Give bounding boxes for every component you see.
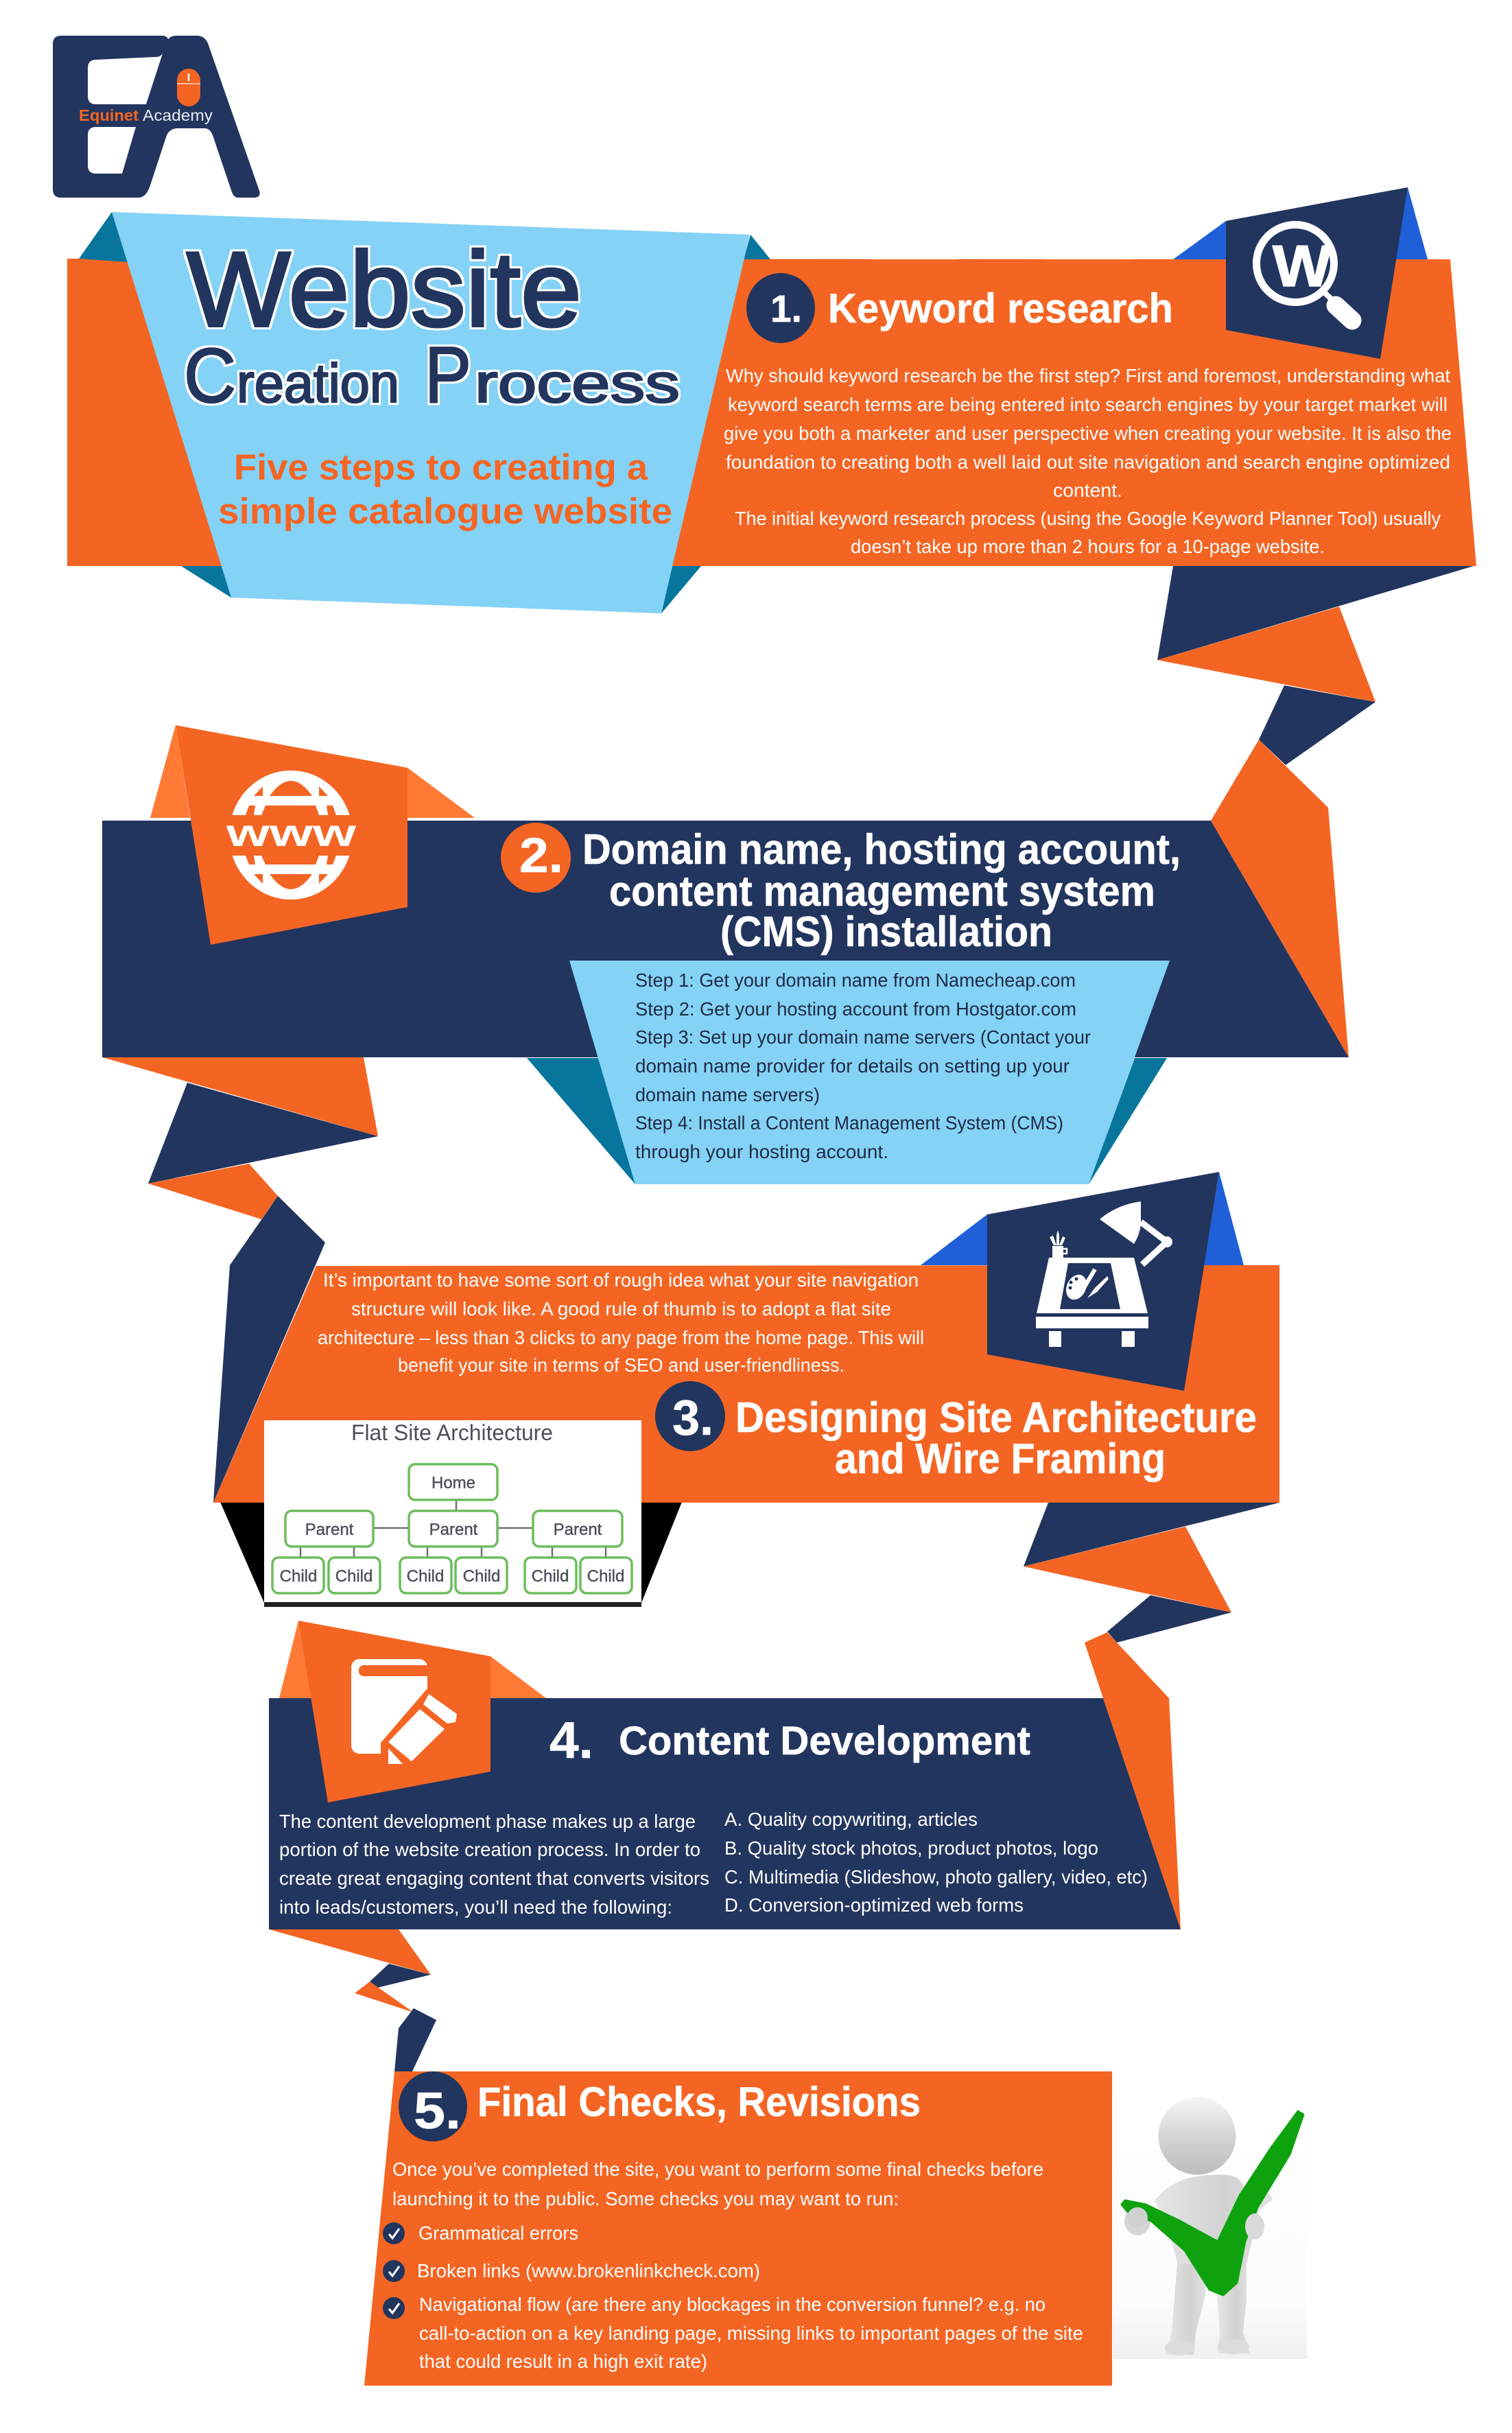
banner 3: orange ribbon [213, 1265, 1279, 1503]
diagram labels: Parent [429, 1520, 478, 1539]
step 1 icon: magnifier with W: W [1273, 234, 1332, 299]
step 2 panel: step list: through your hosting account. [635, 1141, 888, 1162]
step 4 heading: Content Development [619, 1719, 1030, 1763]
step 1 icon: magnifier with W [1173, 187, 1428, 359]
illustration: figure holding green check mark [1113, 2097, 1307, 2359]
step 2 heading: content management system [609, 868, 1155, 915]
step 2 panel: step list: Step 2: Get your hosting account from Hostgator.com [635, 998, 1076, 1020]
step 5 intro: Once you’ve completed the site, you want to perform some final checks before [392, 2159, 1043, 2180]
step 2 number [501, 823, 571, 893]
diagram labels: Child [335, 1567, 373, 1586]
step 5 number [399, 2071, 467, 2141]
step 2 panel: step list: Step 1: Get your domain name from Namecheap.com [635, 969, 1076, 991]
connector ribbon 2 to 3 [213, 1196, 325, 1503]
step 3 heading: Designing Site Architecture [735, 1394, 1257, 1442]
step 4 list: D. Conversion-optimized web forms [724, 1894, 1024, 1916]
step 4 list [724, 1809, 1148, 1916]
banner 3 back folds: black [220, 1502, 682, 1603]
diagram labels: Child [407, 1567, 444, 1586]
banner 4 right fold [1085, 1632, 1181, 1929]
step 1 body text: content. [1053, 480, 1122, 501]
title: Creation Process: reation [237, 353, 399, 414]
step 2 panel: step list: Step 4: Install a Content Management System (CMS) [635, 1112, 1063, 1133]
diagram labels: Child [587, 1567, 624, 1586]
step 3 number: 3. [672, 1391, 713, 1446]
step 1 body text: doesn’t take up more than 2 hours for a 10-page website. [851, 536, 1325, 557]
step 4 list: B. Quality stock photos, product photos, logo [724, 1837, 1098, 1859]
step 2 panel: step list: Step 3: Set up your domain name servers (Contact your [635, 1026, 1091, 1048]
step 5 heading: Final Checks, Revisions [477, 2079, 921, 2125]
diagram labels: Child [532, 1567, 569, 1586]
step 4 number: 4. [550, 1711, 593, 1769]
step 2 icon: www globe: www [226, 811, 357, 854]
diagram labels: Home [432, 1474, 475, 1492]
bullet: navigational flow: Navigational flow (are there any blockages in the conversion funnel? e.g. no [419, 2294, 1046, 2315]
banner 1: orange ribbon [67, 259, 1476, 566]
bullet: broken links: Broken links (www.brokenlinkcheck.com) [417, 2260, 760, 2281]
title: Creation Process: rocess [475, 353, 680, 414]
step 3 heading: and Wire Framing [835, 1435, 1166, 1483]
logo wordmark: Academy [143, 106, 213, 124]
step 3 number [655, 1381, 725, 1451]
step 4 left text: create great engaging content that converts visitors [279, 1868, 709, 1889]
step 1 body text: give you both a marketer and user perspective when creating your website. It is also the [724, 423, 1452, 444]
step 3 body text: structure will look like. A good rule of thumb is to adopt a flat site [351, 1298, 891, 1319]
title: Creation Process: C [184, 333, 236, 419]
title: Creation Process [184, 330, 680, 419]
step 3 icon: drafting desk [921, 1172, 1244, 1391]
subtitle: Five steps to creating a [234, 447, 648, 488]
title: Creation Process: P [425, 330, 471, 419]
step 3 body text: It’s important to have some sort of rough idea what your site navigation [323, 1269, 919, 1291]
bullet: navigational flow: call-to-action on a key landing page, missing links to important pages of the site [419, 2323, 1083, 2344]
subtitle [218, 447, 672, 532]
logo wordmark [79, 106, 213, 124]
step 1 body text: The initial keyword research process (using the Google Keyword Planner Tool) usually [735, 508, 1441, 529]
step 2 heading: (CMS) installation [720, 908, 1052, 956]
diagram connectors [300, 1500, 606, 1558]
step 2 panel: step list: domain name servers) [635, 1084, 820, 1105]
step 1 heading: Keyword research [828, 285, 1173, 331]
step 2 heading [582, 826, 1181, 956]
logo mouse [177, 69, 200, 106]
diagram labels [280, 1474, 624, 1586]
bullet: grammatical errors: Grammatical errors [418, 2222, 578, 2244]
diagram labels: Child [280, 1567, 317, 1586]
bullet: navigational flow: that could result in a high exit rate) [419, 2351, 707, 2372]
banner 4: navy ribbon [269, 1698, 1181, 1929]
step 1 body text [724, 365, 1452, 557]
step 5 number: 5. [414, 2082, 461, 2139]
logo wordmark: Equinet [79, 106, 139, 124]
step 4 list: A. Quality copywriting, articles [724, 1809, 978, 1830]
diagram labels: Child [463, 1567, 500, 1586]
step 3 heading [735, 1394, 1257, 1483]
step 4 list: C. Multimedia (Slideshow, photo gallery, video, etc) [724, 1866, 1148, 1888]
step 5 intro [392, 2159, 1043, 2209]
step 2 panel folds [527, 1058, 1167, 1184]
diagram title: Flat Site Architecture [351, 1420, 553, 1445]
banner 2: navy ribbon [102, 821, 1349, 1057]
bullet: navigational flow [383, 2294, 1083, 2372]
step 2 panel: step list [569, 961, 1170, 1184]
step 4 left text [279, 1811, 709, 1918]
step 2 icon: www globe [150, 725, 475, 945]
banner 5: orange panel [364, 2071, 1112, 2386]
connector ribbon 3 to 4 [1024, 1503, 1279, 1643]
step 5 intro: launching it to the public. Some checks you may want to run: [392, 2188, 899, 2209]
step 4 left text: portion of the website creation process. In order to [279, 1839, 700, 1860]
step 3 body text: benefit your site in terms of SEO and user-friendliness. [398, 1354, 844, 1376]
step 1 body text: Why should keyword research be the first step? First and foremost, understanding what [726, 365, 1450, 386]
step 3 body text [318, 1269, 924, 1376]
step 2 panel: step list: domain name provider for details on setting up your [635, 1055, 1070, 1077]
title: Website: Website [187, 230, 582, 349]
logo: Equinet Academy [53, 36, 260, 198]
step 4 icon: book and pencil [279, 1621, 546, 1802]
banner 1 folds at hero panel [79, 212, 770, 613]
step 2 heading: Domain name, hosting account, [582, 826, 1181, 873]
step 1 body text: keyword search terms are being entered into search engines by your target market will [728, 394, 1448, 415]
step 2 number: 2. [519, 829, 563, 883]
connector ribbon 1 to 2 [1157, 566, 1474, 765]
step 4 left text: The content development phase makes up a large [279, 1811, 696, 1832]
flat site architecture diagram [264, 1420, 641, 1607]
connector ribbon 4 to 5 [269, 1929, 436, 2071]
banner 2 left folds [102, 1057, 378, 1219]
diagram labels: Parent [554, 1520, 602, 1539]
subtitle: simple catalogue website [218, 491, 672, 532]
step 1 body text: foundation to creating both a well laid out site navigation and search engine optimized [726, 451, 1450, 473]
diagram labels: Parent [305, 1520, 354, 1539]
step 1 number: 1. [770, 287, 802, 330]
hero panel: title [112, 212, 750, 613]
step 3 body text: architecture – less than 3 clicks to any page from the home page. This will [318, 1327, 924, 1348]
diagram boxes [272, 1464, 632, 1593]
step 4 left text: into leads/customers, you’ll need the following: [279, 1896, 672, 1918]
banner 2 right fold [1211, 740, 1349, 1057]
step 1 number [746, 273, 815, 343]
